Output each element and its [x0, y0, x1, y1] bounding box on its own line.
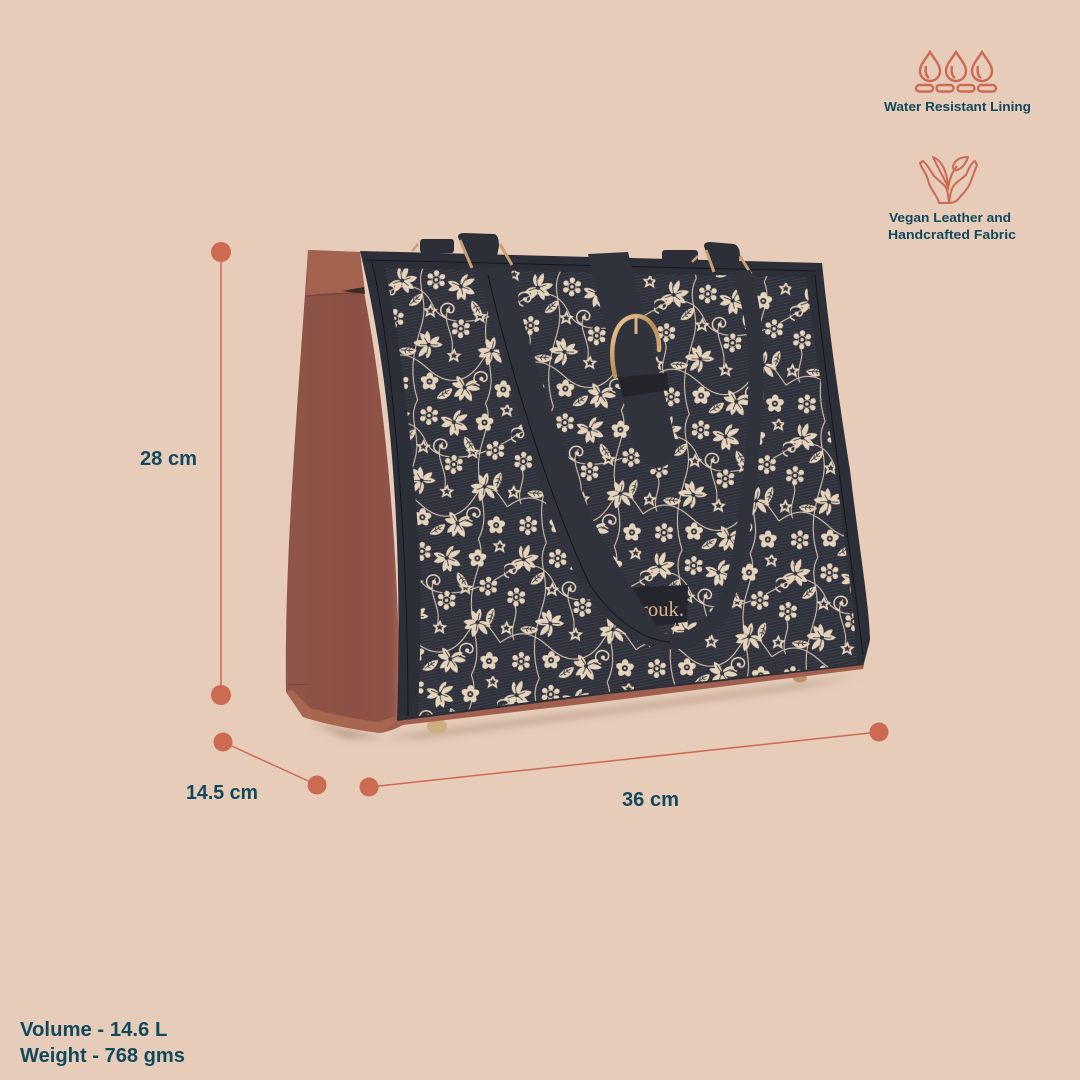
feature: water resistant lining	[884, 52, 1031, 114]
belt keeper	[618, 373, 669, 397]
stitching	[366, 260, 863, 716]
depth label: 14.5 cm	[186, 782, 258, 804]
volume and weight: Weight - 768 gms	[20, 1045, 185, 1067]
brand name: rouk.	[641, 597, 684, 621]
side panel	[286, 250, 400, 733]
icon: brass feet	[427, 674, 807, 734]
brand label	[622, 585, 688, 627]
width label: 36 cm	[622, 789, 679, 811]
bottom rim	[380, 665, 864, 733]
icon: water drops	[916, 52, 996, 92]
strap loops and rings	[412, 233, 751, 274]
icon: gold buckle	[612, 316, 659, 376]
height label: 28 cm	[140, 448, 197, 470]
feature: vegan leather and handcrafted fabric	[888, 157, 1016, 242]
dimension: height 28 cm	[140, 242, 231, 705]
icon: hands holding leaf	[920, 157, 977, 203]
front belt tab	[588, 252, 676, 468]
buckle pin	[634, 316, 638, 334]
vegan label: Vegan Leather and	[889, 210, 1011, 225]
water label: Water Resistant Lining	[884, 99, 1031, 114]
dark frame	[360, 251, 870, 723]
vegan label: Handcrafted Fabric	[888, 227, 1016, 242]
volume and weight: Volume - 14.6 L	[20, 1019, 167, 1041]
dimension: width 36 cm	[360, 722, 888, 811]
shoulder strap	[476, 266, 764, 649]
strap stitching	[488, 275, 670, 642]
handbag	[286, 233, 870, 738]
dimension: depth 14.5 cm	[186, 732, 326, 804]
floral fabric panel	[385, 268, 857, 716]
ground shadow	[310, 676, 860, 738]
